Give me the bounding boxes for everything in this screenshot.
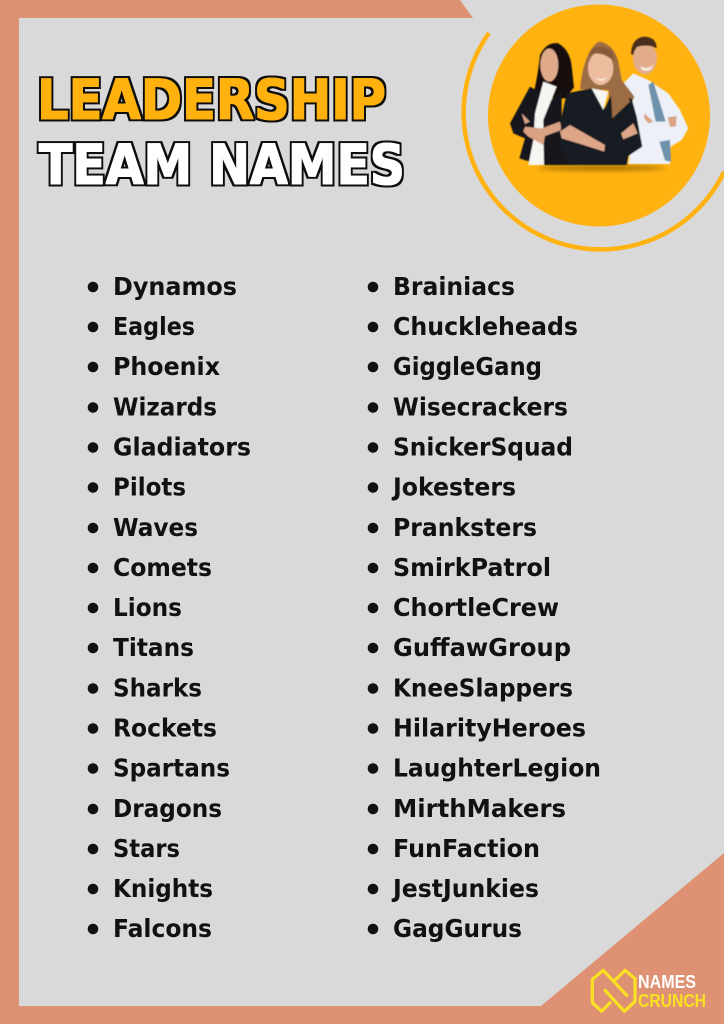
list: right column: Chuckleheads (393, 312, 578, 341)
wordmark: crunch: CRUNCH (638, 990, 706, 1011)
title line: leadership: LEADERSHIP (37, 68, 386, 132)
list: right column: Pranksters (393, 513, 537, 542)
list: left column: Lions (113, 593, 182, 622)
list: right column: FunFaction (393, 834, 540, 863)
list: left column: Dragons (113, 794, 222, 823)
woman in centre (560, 42, 642, 165)
list: left column: Gladiators (113, 432, 251, 462)
list: left column: Eagles (113, 312, 195, 341)
list: left column: Dynamos (113, 272, 237, 301)
list: right column: GuffawGroup (393, 633, 571, 662)
list: right column: JestJunkies (391, 874, 539, 903)
yellow circle (488, 4, 710, 226)
list: left column: Phoenix (113, 352, 220, 381)
list: left column: Knights (113, 874, 213, 903)
list: left column: Waves (113, 513, 198, 542)
list: left column: Wizards (113, 392, 217, 422)
list: left column: Titans (113, 633, 194, 662)
list: left column: Pilots (113, 472, 186, 502)
photo: three business people (510, 37, 688, 170)
list: left column: Spartans (113, 754, 230, 782)
list: left column: Comets (113, 553, 212, 582)
list: right column: Jokesters (391, 472, 516, 502)
list: right column: Wisecrackers (393, 392, 568, 422)
list: right column: MirthMakers (393, 794, 566, 823)
list: right column: Brainiacs (393, 272, 515, 301)
title (37, 68, 405, 197)
list: right column: GiggleGang (393, 352, 542, 381)
list: left column: Rockets (113, 714, 217, 742)
list: right column: LaughterLegion (393, 754, 601, 782)
list: right column: SnickerSquad (393, 432, 573, 462)
list: right column: GagGurus (393, 914, 522, 943)
list: left column: Stars (113, 834, 180, 863)
decorative yellow arc (464, 33, 724, 249)
ground shadow (538, 166, 665, 170)
list: right column (368, 272, 601, 943)
logo: names crunch (592, 970, 706, 1011)
man at right (622, 37, 688, 164)
list: left column: Sharks (113, 674, 202, 702)
list: right column: SmirkPatrol (393, 553, 551, 582)
list: right column: KneeSlappers (393, 674, 573, 702)
list: right column: HilarityHeroes (393, 714, 586, 742)
title line: team names: TEAM NAMES (39, 133, 405, 197)
woman at left (510, 43, 574, 165)
list: left column: Falcons (113, 914, 212, 943)
list: right column: ChortleCrew (393, 593, 559, 622)
wordmark: names: NAMES (638, 972, 696, 992)
icon: N monogram (592, 970, 635, 1011)
list: left column (88, 272, 251, 943)
